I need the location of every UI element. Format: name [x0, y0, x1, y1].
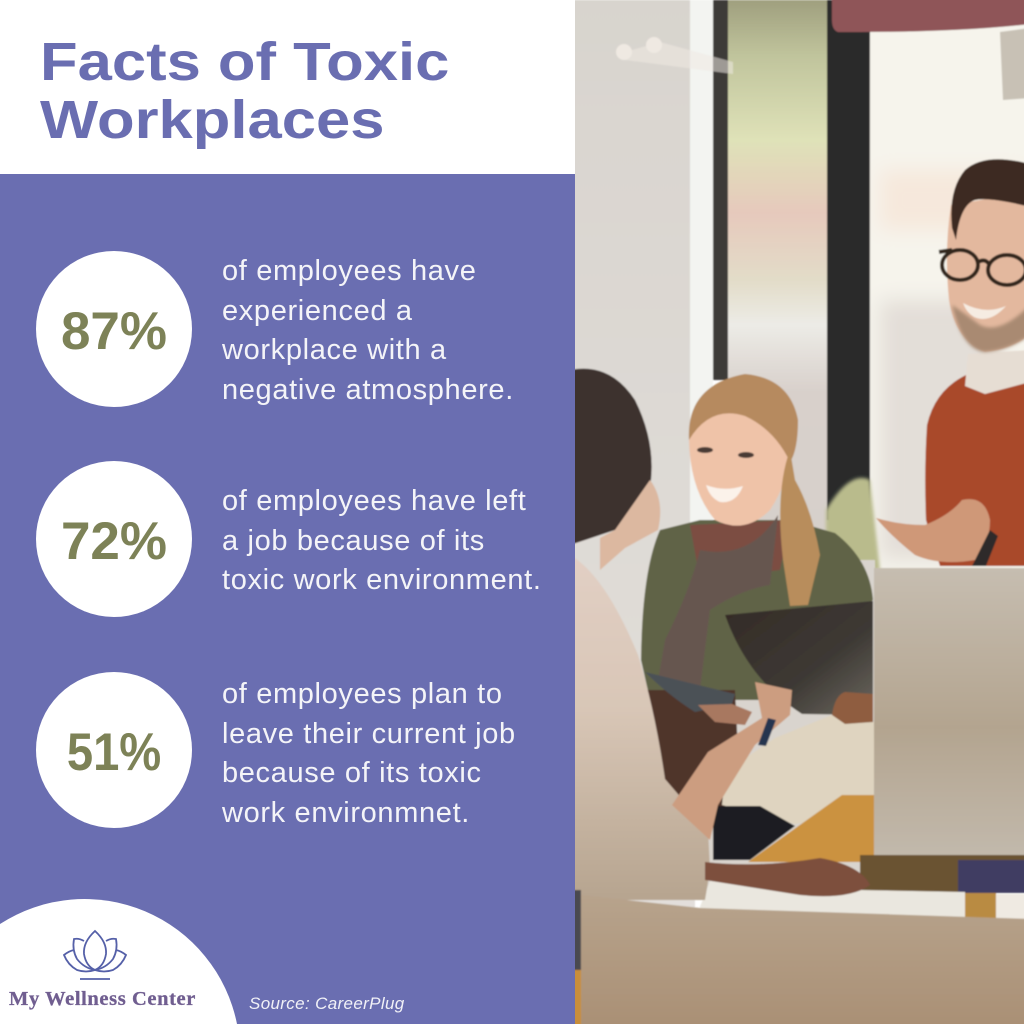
foreground person: hair: [570, 369, 652, 545]
fact text 3: because of its toxic: [222, 757, 482, 789]
fact text 3: leave their current job: [222, 718, 516, 750]
foreground person: neck: [600, 480, 660, 570]
woman: scarf: [658, 515, 778, 690]
woman: smile: [706, 485, 743, 502]
ceiling lamp: [832, 0, 1024, 32]
wall lights: [616, 37, 733, 74]
man: glasses: [939, 250, 1024, 285]
front box bottom: [581, 895, 1024, 1024]
title: [40, 32, 449, 150]
source: Source: CareerPlug: [249, 994, 405, 1013]
white column: [690, 0, 713, 600]
man: watch: [972, 530, 998, 566]
man: sweater: [925, 365, 1024, 566]
dark strip beside front box: [570, 890, 581, 972]
woman: lower dark clothing: [640, 690, 740, 812]
header band: [0, 0, 575, 174]
tablet: [645, 672, 735, 712]
stat circle: 72%: [36, 461, 192, 617]
man: collar: [965, 350, 1024, 394]
fact text 1: workplace with a: [222, 334, 447, 366]
fact text 3: [222, 678, 516, 829]
dark pillar: [827, 0, 870, 520]
man: smile: [963, 303, 1006, 319]
panel: facts: [0, 174, 575, 1024]
fact text 3: work environmnet.: [222, 797, 470, 829]
woman: hand on tablet: [698, 704, 752, 725]
woman: chest: [690, 520, 790, 580]
man: beard: [952, 305, 1024, 352]
fact text 1: [222, 255, 514, 406]
window right: [868, 0, 1024, 580]
fact text 2: a job because of its: [222, 525, 485, 557]
stat circle: 87%: [36, 251, 192, 407]
fact text 1: experienced a: [222, 295, 413, 327]
fact text 1: of employees have: [222, 255, 476, 287]
stat circle: 87%: 87%: [61, 302, 167, 361]
photo: coworkers talking in an office: [575, 0, 1024, 1024]
laptop: [725, 601, 873, 715]
woman: hair: [689, 374, 798, 462]
woman: face: [689, 398, 793, 526]
man: neck and face: [947, 190, 1024, 352]
man: hair: [951, 159, 1024, 240]
dark trousers: [713, 806, 795, 860]
woman: cardigan: [641, 520, 873, 700]
fact text 3: of employees plan to: [222, 678, 503, 710]
fact text 1: negative atmosphere.: [222, 374, 514, 406]
woman: ponytail: [780, 450, 820, 606]
window left: [728, 0, 830, 560]
stat circle: 51%: 51%: [67, 723, 161, 782]
woman: eyes: [697, 447, 754, 458]
pen: [758, 718, 776, 746]
logo background semicircle: [0, 899, 237, 1024]
stat circle: 51%: [36, 672, 192, 828]
woman: trousers: [722, 715, 875, 824]
woman: hand on laptop: [832, 692, 873, 724]
title: Workplaces: [40, 90, 384, 150]
magazines: [860, 855, 1024, 893]
fact text 2: [222, 485, 542, 596]
front box right: [874, 568, 1024, 858]
stat circle: 72%: 72%: [61, 512, 167, 571]
fact text 2: toxic work environment.: [222, 564, 542, 596]
foreground person: lower hand: [705, 858, 870, 896]
plant behind woman: [826, 478, 880, 570]
foreground person: shirt: [570, 555, 710, 900]
wooden table: [748, 795, 875, 862]
fact text 2: of employees have left: [222, 485, 526, 517]
logo wordmark: My Wellness Center: [9, 988, 196, 1010]
title: Facts of Toxic: [40, 32, 449, 92]
background under woman: [695, 560, 875, 900]
wall: [570, 0, 695, 1024]
papers: [698, 876, 965, 920]
dark frame: [713, 0, 728, 380]
foreground person: arm: [672, 682, 792, 840]
lamp shade: [1000, 28, 1024, 100]
man: hand: [876, 499, 990, 562]
icon: lotus logo: [63, 930, 127, 980]
